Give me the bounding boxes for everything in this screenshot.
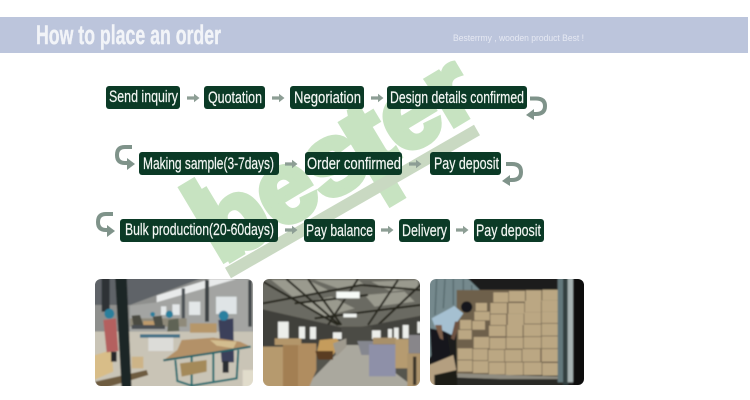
step: pay deposit: Pay deposit: [476, 221, 541, 240]
curved arrow: turn right: [502, 164, 521, 186]
step: making sample: Making sample(3-7days): [143, 154, 274, 173]
step: send inquiry: Send inquiry: [109, 87, 178, 106]
step: order confirmed: Order confirmed: [307, 154, 401, 173]
step: pay deposit: [474, 219, 544, 242]
step: design details confirmed: Design details confirmed: [390, 88, 524, 107]
arrow: [187, 94, 200, 102]
header band: [0, 17, 748, 53]
step: making sample: [139, 152, 279, 175]
arrow: [371, 94, 384, 102]
arrow: [285, 226, 298, 234]
step row 3: [98, 214, 544, 242]
watermark: bester logo: bester: [179, 31, 493, 282]
step: delivery: Delivery: [402, 221, 447, 240]
photo: warehouse with stacked cartons: [263, 279, 420, 386]
photo: workshop with workers: [95, 279, 253, 386]
curved arrow: turn left: [98, 214, 115, 237]
step: design details confirmed: [387, 86, 527, 109]
arrow: [409, 160, 422, 168]
curved arrow: turn right: [526, 98, 545, 120]
step: pay deposit: [430, 152, 501, 175]
curved arrow: turn left: [117, 147, 135, 170]
step: negoriation: [290, 86, 364, 109]
arrow: [285, 160, 298, 168]
photo: loading cartons into a container: [430, 279, 584, 385]
step row 1: [106, 86, 545, 120]
step: pay deposit: Pay deposit: [434, 154, 499, 173]
step: negoriation: Negoriation: [294, 88, 361, 107]
step: pay balance: [304, 219, 375, 242]
arrow: [272, 94, 284, 102]
arrow: [381, 226, 394, 234]
step: send inquiry: [106, 86, 180, 109]
step row 2: [117, 147, 521, 186]
step: bulk production: [120, 219, 278, 242]
step: quotation: Quotation: [208, 88, 262, 107]
step: pay balance: Pay balance: [306, 221, 373, 240]
title: How to place an order: [36, 20, 221, 50]
step: delivery: [399, 219, 450, 242]
tagline: Besterrmy , wooden product Best !: [453, 33, 584, 43]
step: bulk production: Bulk production(20-60days): [125, 220, 274, 239]
arrow: [456, 226, 468, 234]
step: order confirmed: [305, 152, 402, 175]
step: quotation: [204, 86, 265, 109]
